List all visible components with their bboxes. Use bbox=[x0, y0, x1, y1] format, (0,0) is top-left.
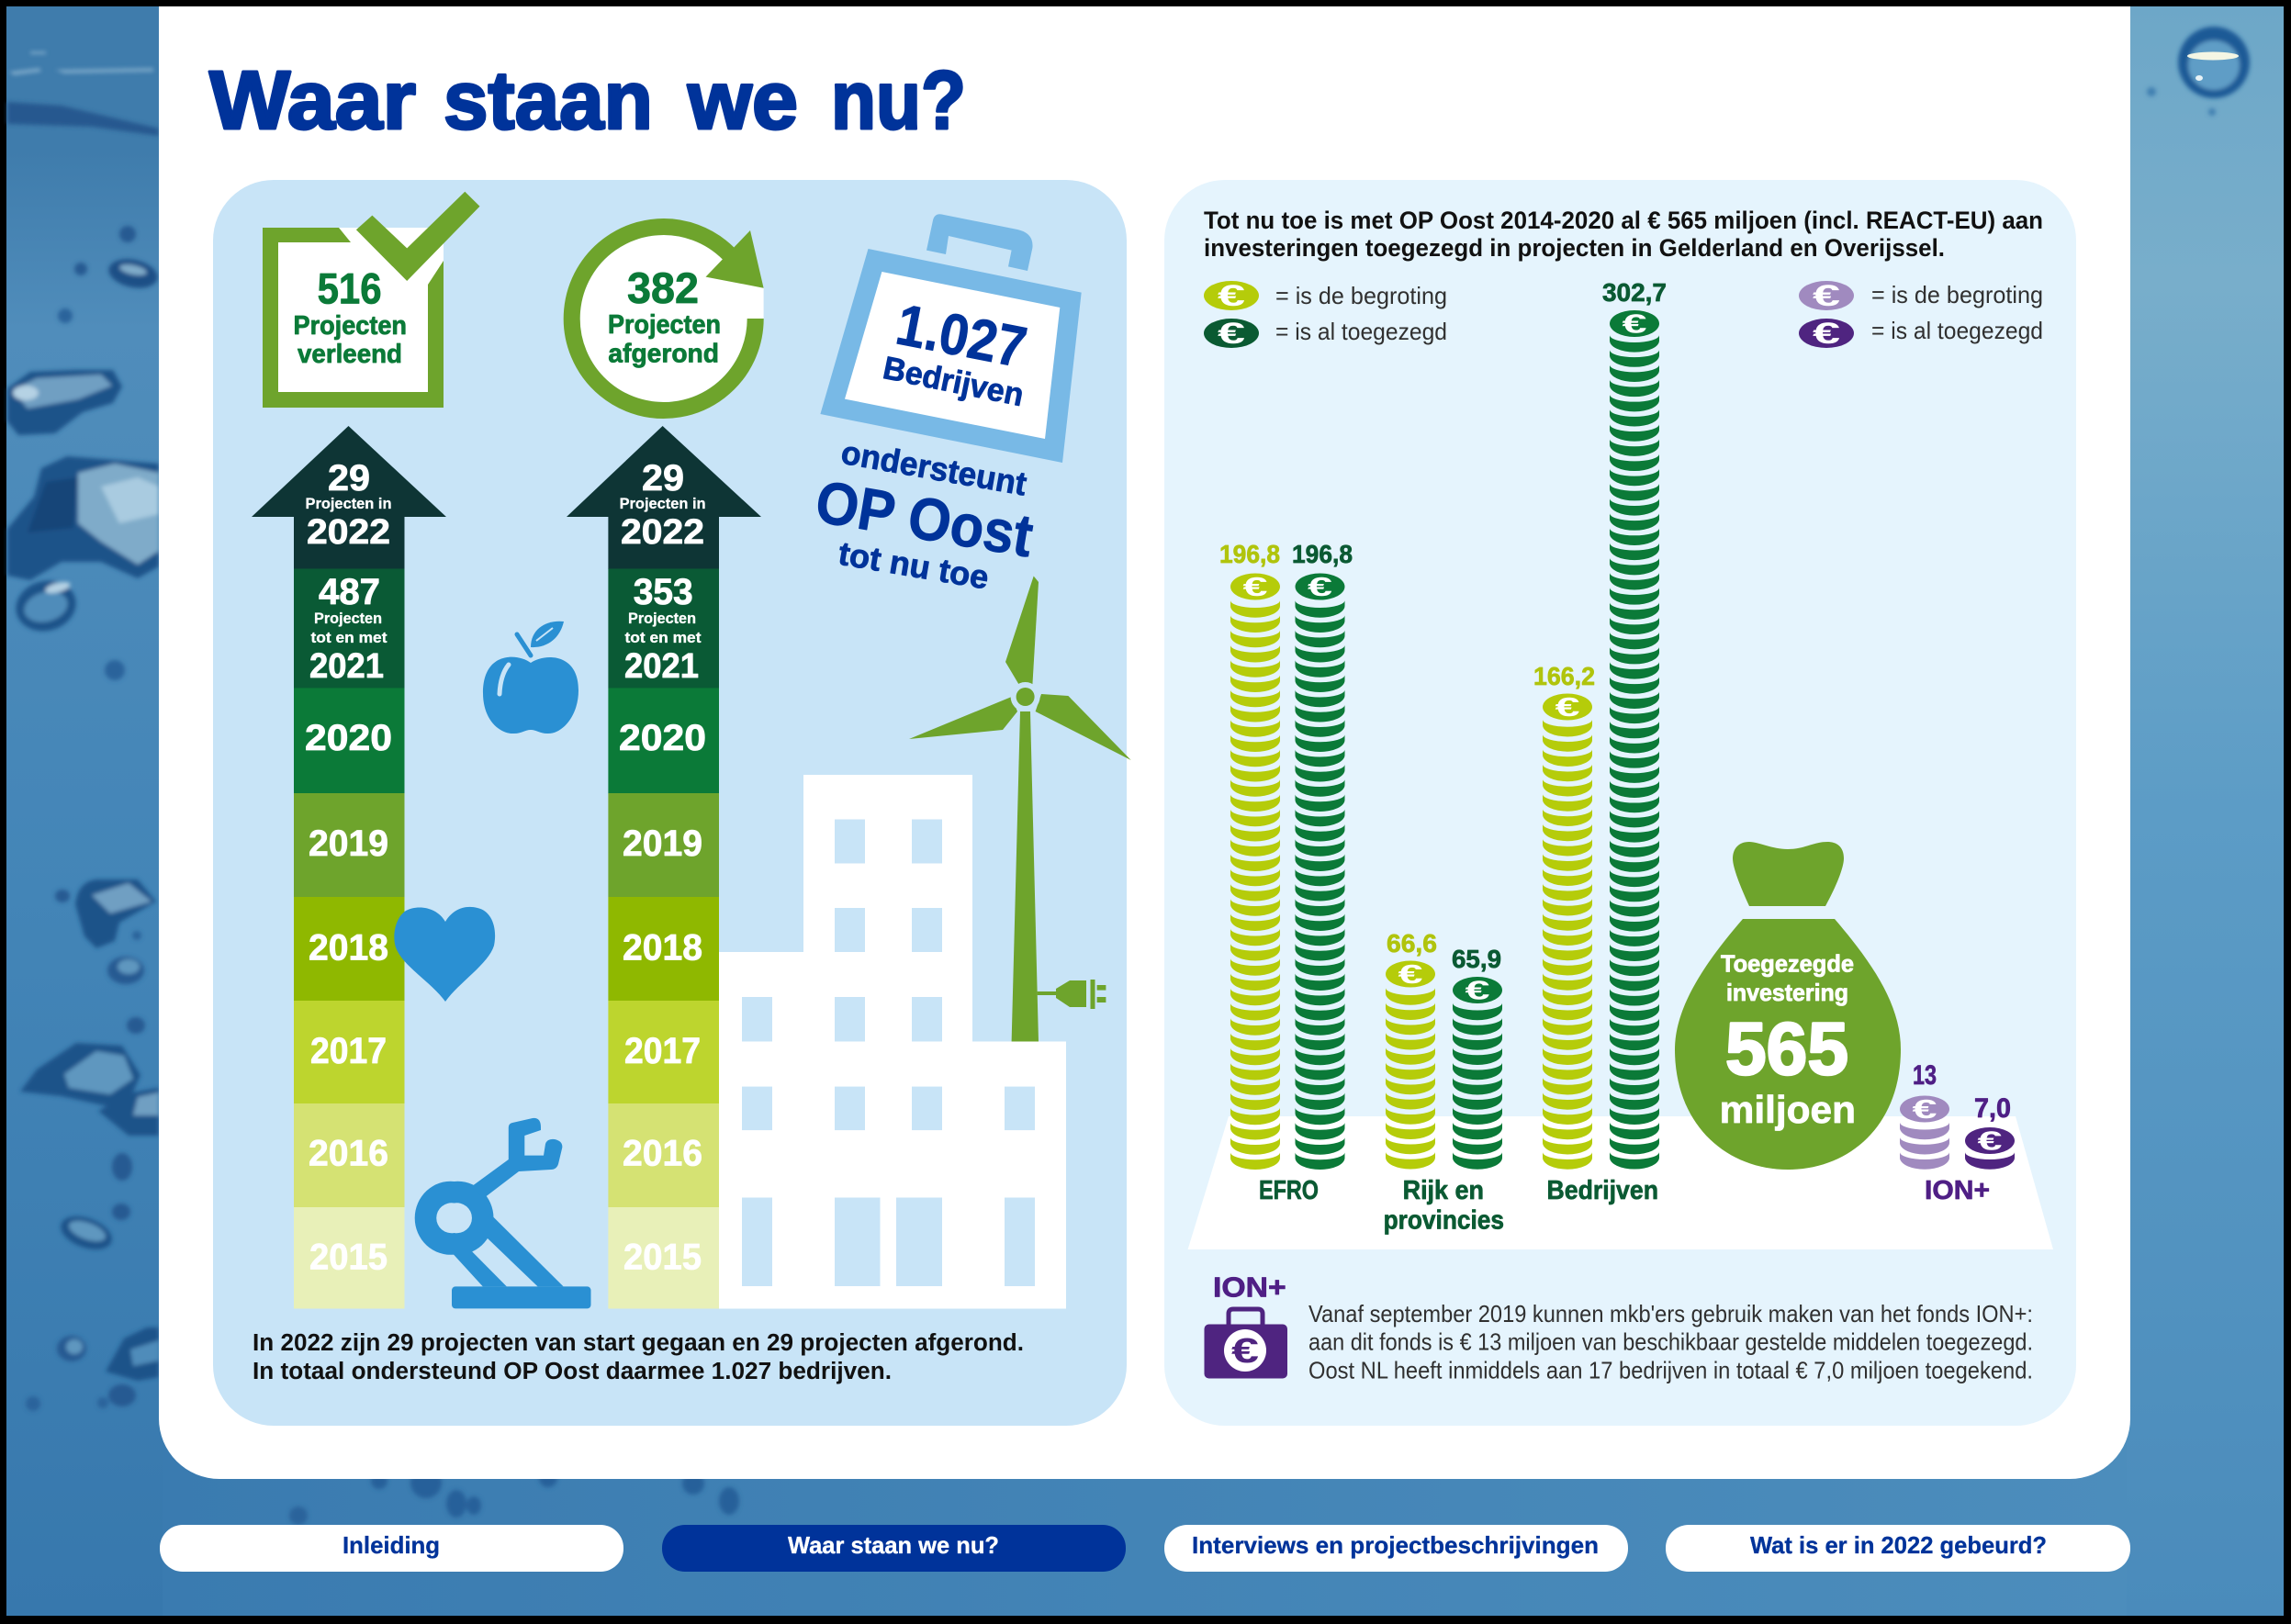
icon: heart bbox=[394, 907, 495, 1002]
icon: briefcase with 1.027 companies: 1.027 bbox=[892, 292, 1031, 380]
button: Wat is er in 2022 gebeurd? bbox=[1666, 1525, 2130, 1572]
button: Inleiding bbox=[160, 1525, 623, 1572]
arrow: projects completed per year: 2019 bbox=[623, 823, 702, 864]
icon: circular arrow with 382 projects completed: Projecten bbox=[608, 310, 721, 340]
legend: green coins: = is al toegezegd bbox=[1275, 318, 1447, 345]
arrow: projects completed per year: Projecten bbox=[628, 610, 696, 627]
heading text: investeringen toegezegd in projecten in Gelderland en Overijssel. bbox=[1204, 234, 1945, 262]
button: Wat is er in 2022 gebeurd?: Wat is er in 2022 gebeurd? bbox=[1750, 1531, 2047, 1559]
chart: Rijk en provincies coin stacks: 65,9 bbox=[1452, 945, 1501, 973]
navigation buttons bbox=[160, 1525, 2130, 1572]
text: summary of projects bbox=[253, 1330, 1024, 1384]
text: ondersteunt OP Oost tot nu toe bbox=[811, 433, 1038, 597]
icon: money bag with total: miljoen bbox=[1720, 1088, 1856, 1131]
panel: projects and companies bbox=[213, 180, 1131, 1426]
chart: EFRO coin stacks bbox=[1219, 540, 1353, 1205]
button: Interviews en projectbeschrijvingen bbox=[1164, 1525, 1628, 1572]
arrow: projects completed per year: 2020 bbox=[619, 718, 706, 758]
arrow: projects granted per year: 487 bbox=[319, 572, 380, 612]
legend: purple coins bbox=[1799, 279, 2043, 350]
arrow: projects granted per year: 2017 bbox=[310, 1031, 387, 1071]
chart: Rijk en provincies coin stacks: € bbox=[1398, 960, 1423, 990]
title: we bbox=[687, 55, 798, 147]
chart: Bedrijven coin stacks bbox=[1533, 278, 1667, 1205]
chart: Bedrijven coin stacks: € bbox=[1555, 693, 1579, 722]
chart: EFRO coin stacks: € bbox=[1243, 573, 1267, 602]
chart: EFRO coin stacks: 196,8 bbox=[1219, 540, 1280, 568]
title: nu? bbox=[831, 55, 966, 147]
legend: purple coins: € bbox=[1813, 317, 1840, 350]
legend: green coins: = is de begroting bbox=[1275, 282, 1447, 309]
chart: ION+ coin stacks bbox=[1900, 1060, 2015, 1205]
title: staan bbox=[444, 55, 653, 147]
arrow: projects completed per year: 2017 bbox=[624, 1031, 701, 1071]
arrow: projects granted per year: 29 bbox=[328, 458, 370, 498]
text: summary of projects: In 2022 zijn 29 projecten van start gegaan en 29 projecten afgerond. bbox=[253, 1330, 1024, 1356]
text: summary of projects: In totaal ondersteund OP Oost daarmee 1.027 bedrijven. bbox=[253, 1359, 892, 1384]
chart: ION+ coin stacks: € bbox=[1978, 1127, 2002, 1157]
white main card bbox=[159, 6, 2130, 1479]
legend: green coins bbox=[1204, 279, 1447, 350]
arrow: projects completed per year: 2016 bbox=[623, 1134, 702, 1174]
arrow: projects granted per year: 2018 bbox=[309, 927, 388, 968]
arrow: projects granted per year: 2021 bbox=[309, 647, 384, 686]
platform under coin stacks bbox=[1188, 1116, 2053, 1249]
icon: money bag with total: investering bbox=[1726, 979, 1848, 1006]
chart: Rijk en provincies coin stacks bbox=[1384, 929, 1504, 1236]
arrow: projects completed per year bbox=[567, 426, 761, 1309]
text: ondersteunt OP Oost tot nu toe: ondersteunt bbox=[838, 433, 1029, 503]
panel: investments bbox=[1164, 180, 2076, 1426]
text: ION+ explanation: Vanaf september 2019 kunnen mkb'ers gebruik maken van het fonds ION+: bbox=[1308, 1300, 2033, 1327]
ION+ heading and purple case icon: ION+ bbox=[1213, 1271, 1286, 1304]
arrow: projects completed per year: 2018 bbox=[623, 927, 702, 968]
arrow: projects completed per year: 2021 bbox=[624, 647, 699, 686]
arrow: projects granted per year bbox=[252, 426, 446, 1309]
arrow: projects granted per year: 2020 bbox=[305, 718, 392, 758]
icon: briefcase with 1.027 companies bbox=[820, 214, 1082, 463]
arrow: projects completed per year: 2022 bbox=[621, 513, 704, 552]
text: ondersteunt OP Oost tot nu toe: tot nu toe bbox=[836, 534, 992, 597]
button: Interviews en projectbeschrijvingen: Interviews en projectbeschrijvingen bbox=[1192, 1531, 1599, 1559]
icon: circular arrow with 382 projects completed: afgerond bbox=[608, 340, 719, 369]
icon: circular arrow with 382 projects completed bbox=[572, 227, 764, 410]
legend: purple coins: € bbox=[1813, 279, 1840, 312]
chart: Bedrijven coin stacks: Bedrijven bbox=[1546, 1176, 1658, 1205]
arrow: projects completed per year: Projecten in bbox=[620, 495, 706, 512]
illustration: white building bbox=[719, 775, 1066, 1309]
heading text bbox=[1204, 207, 2043, 262]
ION+ heading and purple case icon bbox=[1205, 1271, 1287, 1379]
icon: money bag with total: 565 bbox=[1725, 1008, 1848, 1091]
icon: briefcase with 1.027 companies: Bedrijven bbox=[880, 350, 1027, 413]
legend: green coins: € bbox=[1218, 317, 1245, 350]
chart: Bedrijven coin stacks: 302,7 bbox=[1602, 278, 1667, 307]
heading text: Tot nu toe is met OP Oost 2014-2020 al € 565 miljoen (incl. REACT-EU) aan bbox=[1204, 207, 2043, 234]
title bbox=[209, 55, 966, 147]
chart: ION+ coin stacks: € bbox=[1912, 1095, 1937, 1125]
icon: money bag with total: Toegezegde bbox=[1721, 950, 1854, 978]
arrow: projects granted per year: Projecten bbox=[314, 610, 382, 627]
icon: checkbox with 516 projects granted bbox=[263, 192, 479, 408]
chart: ION+ coin stacks: 13 bbox=[1913, 1060, 1937, 1091]
text: ondersteunt OP Oost tot nu toe: OP Oost bbox=[811, 467, 1038, 569]
chart: Bedrijven coin stacks: 166,2 bbox=[1533, 662, 1595, 690]
button: Waar staan we nu? (active): Waar staan we nu? bbox=[788, 1531, 999, 1559]
arrow: projects granted per year: 2022 bbox=[307, 513, 390, 552]
chart: EFRO coin stacks: 196,8 bbox=[1292, 540, 1353, 568]
text: ION+ explanation: aan dit fonds is € 13 miljoen van beschikbaar gestelde middelen toegezegd. bbox=[1308, 1328, 2033, 1356]
icon: checkbox with 516 projects granted: verleend bbox=[298, 340, 402, 369]
chart: Rijk en provincies coin stacks: 66,6 bbox=[1387, 929, 1437, 958]
arrow: projects granted per year: tot en met bbox=[310, 629, 387, 646]
arrow: projects granted per year: 2016 bbox=[309, 1134, 388, 1174]
button: Waar staan we nu? (active) bbox=[662, 1525, 1126, 1572]
chart: Rijk en provincies coin stacks: Rijk en bbox=[1403, 1176, 1484, 1205]
chart: ION+ coin stacks: ION+ bbox=[1925, 1176, 1990, 1205]
chart: Rijk en provincies coin stacks: € bbox=[1466, 977, 1489, 1006]
icon: apple bbox=[483, 622, 578, 734]
chart: EFRO coin stacks: EFRO bbox=[1259, 1176, 1319, 1205]
legend: purple coins: = is al toegezegd bbox=[1871, 317, 2043, 344]
arrow: projects granted per year: 2015 bbox=[309, 1238, 387, 1278]
icon: robot arm bbox=[415, 1118, 591, 1308]
chart: Bedrijven coin stacks: € bbox=[1622, 310, 1647, 340]
legend: green coins: € bbox=[1218, 279, 1245, 312]
icon: money bag with total bbox=[1675, 842, 1901, 1170]
arrow: projects completed per year: 2015 bbox=[623, 1238, 702, 1278]
chart: ION+ coin stacks: 7,0 bbox=[1974, 1093, 2011, 1124]
button: Inleiding: Inleiding bbox=[343, 1531, 440, 1559]
ION+ heading and purple case icon: € bbox=[1231, 1332, 1259, 1371]
chart: EFRO coin stacks: € bbox=[1308, 573, 1332, 602]
icon: checkbox with 516 projects granted: Projecten bbox=[294, 311, 407, 341]
arrow: projects granted per year: 2019 bbox=[309, 823, 388, 864]
icon: checkbox with 516 projects granted: 516 bbox=[318, 264, 382, 313]
text: ION+ explanation: Oost NL heeft inmiddels aan 17 bedrijven in totaal € 7,0 miljoen toegekend. bbox=[1308, 1356, 2033, 1383]
arrow: projects granted per year: Projecten in bbox=[305, 495, 391, 512]
arrow: projects completed per year: tot en met bbox=[624, 629, 702, 646]
arrow: projects completed per year: 29 bbox=[642, 458, 684, 498]
text: ION+ explanation bbox=[1308, 1300, 2033, 1383]
chart: Rijk en provincies coin stacks: provincies bbox=[1384, 1206, 1504, 1236]
icon: wind turbine with plug bbox=[909, 577, 1131, 1041]
legend: purple coins: = is de begroting bbox=[1871, 281, 2043, 308]
arrow: projects completed per year: 353 bbox=[634, 572, 693, 612]
title: Waar bbox=[209, 55, 416, 147]
icon: circular arrow with 382 projects completed: 382 bbox=[627, 263, 699, 312]
